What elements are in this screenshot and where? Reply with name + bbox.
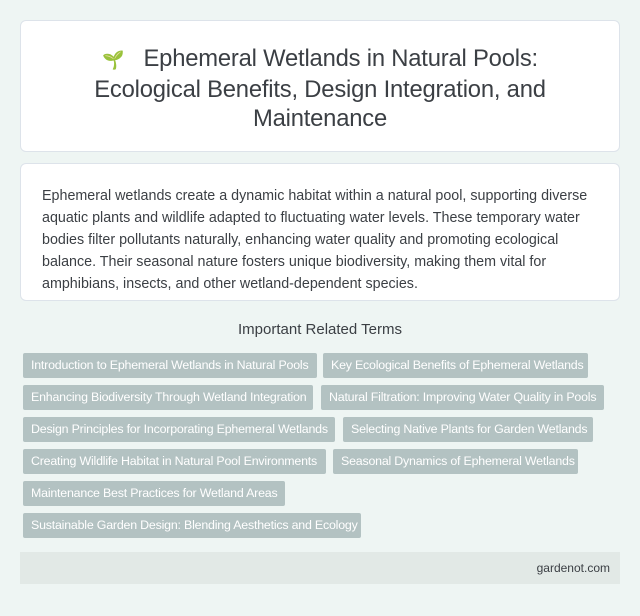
description text: [42, 188, 587, 292]
tag: [343, 417, 593, 442]
title: [94, 45, 546, 132]
tag: [23, 385, 313, 410]
description text: amphibians, insects, and other wetland-dependent species.: [42, 276, 418, 292]
tag: Key Ecological Benefits of Ephemeral Wetlands: [331, 358, 584, 372]
tag: [23, 353, 317, 378]
tag: [23, 417, 335, 442]
section heading: Important Related Terms: [238, 321, 402, 338]
tag: [321, 385, 604, 410]
tag: Selecting Native Plants for Garden Wetlands: [351, 422, 587, 436]
description text: balance. Their seasonal nature fosters unique biodiversity, making them vital for: [42, 254, 546, 270]
tag: [333, 449, 578, 474]
description text: aquatic plants and wildlife adapted to fluctuating water levels. These temporary water: [42, 210, 580, 226]
tag: [23, 449, 326, 474]
tag: Seasonal Dynamics of Ephemeral Wetlands: [341, 454, 575, 468]
header card: [20, 20, 620, 152]
tag: [23, 513, 361, 538]
tag: Enhancing Biodiversity Through Wetland Integration: [31, 390, 306, 404]
tag: Design Principles for Incorporating Ephemeral Wetlands: [31, 422, 328, 436]
description text: bodies filter pollutants naturally, enhancing water quality and promoting ecological: [42, 232, 558, 248]
tag: [23, 481, 285, 506]
footer: [20, 552, 620, 584]
description text: Ephemeral wetlands create a dynamic habitat within a natural pool, supporting diverse: [42, 188, 587, 204]
tag: Sustainable Garden Design: Blending Aesthetics and Ecology: [31, 518, 358, 532]
tag: Maintenance Best Practices for Wetland Areas: [31, 486, 277, 500]
tag: Introduction to Ephemeral Wetlands in Natural Pools: [31, 358, 308, 372]
tag: Natural Filtration: Improving Water Quality in Pools: [329, 390, 596, 404]
tag: [323, 353, 588, 378]
title: 🌱 Ephemeral Wetlands in Natural Pools:: [102, 45, 538, 72]
description card: [20, 163, 620, 301]
title: Ecological Benefits, Design Integration, and: [94, 76, 546, 103]
tag: Creating Wildlife Habitat in Natural Pool Environments: [31, 454, 317, 468]
title: Maintenance: [253, 105, 387, 132]
footer text: gardenot.com: [537, 561, 610, 575]
